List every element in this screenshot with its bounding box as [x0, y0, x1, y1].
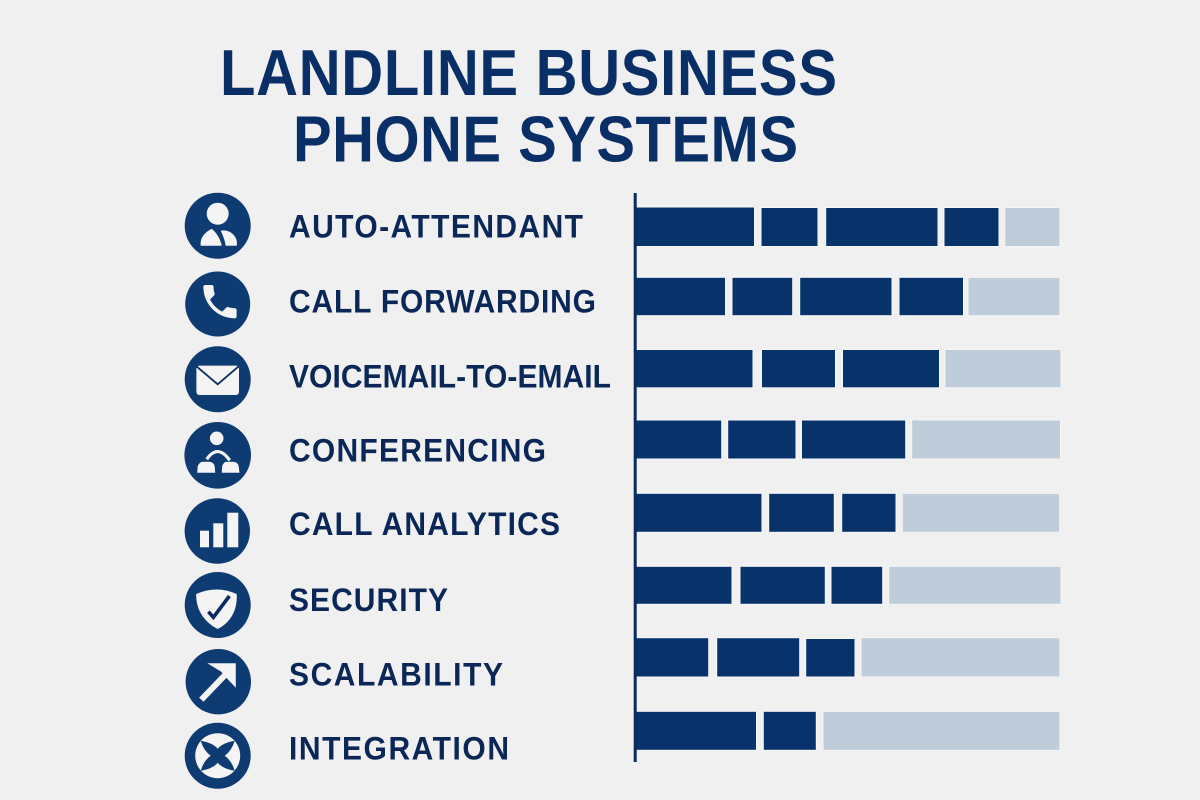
bar: integration — [635, 711, 1060, 750]
icon: person — [185, 193, 251, 259]
title: PHONE SYSTEMS — [293, 103, 798, 176]
title — [220, 37, 837, 176]
icon: conference group — [184, 422, 251, 489]
row: auto-attendant — [185, 193, 1060, 259]
bar: call forwarding — [635, 277, 1060, 316]
bar: conferencing — [635, 420, 1060, 459]
label: integration: INTEGRATION — [289, 730, 509, 767]
bar: call analytics — [635, 493, 1060, 532]
row: integration — [185, 711, 1060, 789]
row: call analytics — [185, 493, 1060, 564]
chart axis — [634, 193, 637, 762]
label: scalability: SCALABILITY — [289, 657, 503, 693]
label: voicemail-to-email: VOICEMAIL-TO-EMAIL — [289, 358, 611, 395]
row: voicemail-to-email — [185, 346, 1061, 412]
row: scalability — [186, 638, 1060, 714]
icon: crossed circle — [185, 723, 251, 789]
icon: envelope — [185, 346, 251, 412]
label: security: SECURITY — [289, 582, 448, 618]
row: conferencing — [184, 420, 1060, 489]
row: security — [185, 566, 1061, 638]
bar: scalability — [635, 638, 1060, 677]
label: call analytics: CALL ANALYTICS — [289, 506, 560, 542]
bar: auto-attendant — [635, 207, 1060, 246]
bar: security — [635, 566, 1061, 604]
row: call forwarding — [185, 272, 1060, 336]
icon: bar chart — [185, 498, 250, 564]
label: auto-attendant: AUTO-ATTENDANT — [289, 208, 583, 245]
icon: upward arrow — [186, 649, 251, 714]
title: LANDLINE BUSINESS — [220, 37, 837, 110]
label: call forwarding: CALL FORWARDING — [289, 284, 596, 320]
icon: shield with check — [185, 572, 251, 638]
label: conferencing: CONFERENCING — [289, 433, 546, 469]
bar: voicemail-to-email — [635, 350, 1061, 388]
icon: telephone handset — [185, 272, 250, 336]
